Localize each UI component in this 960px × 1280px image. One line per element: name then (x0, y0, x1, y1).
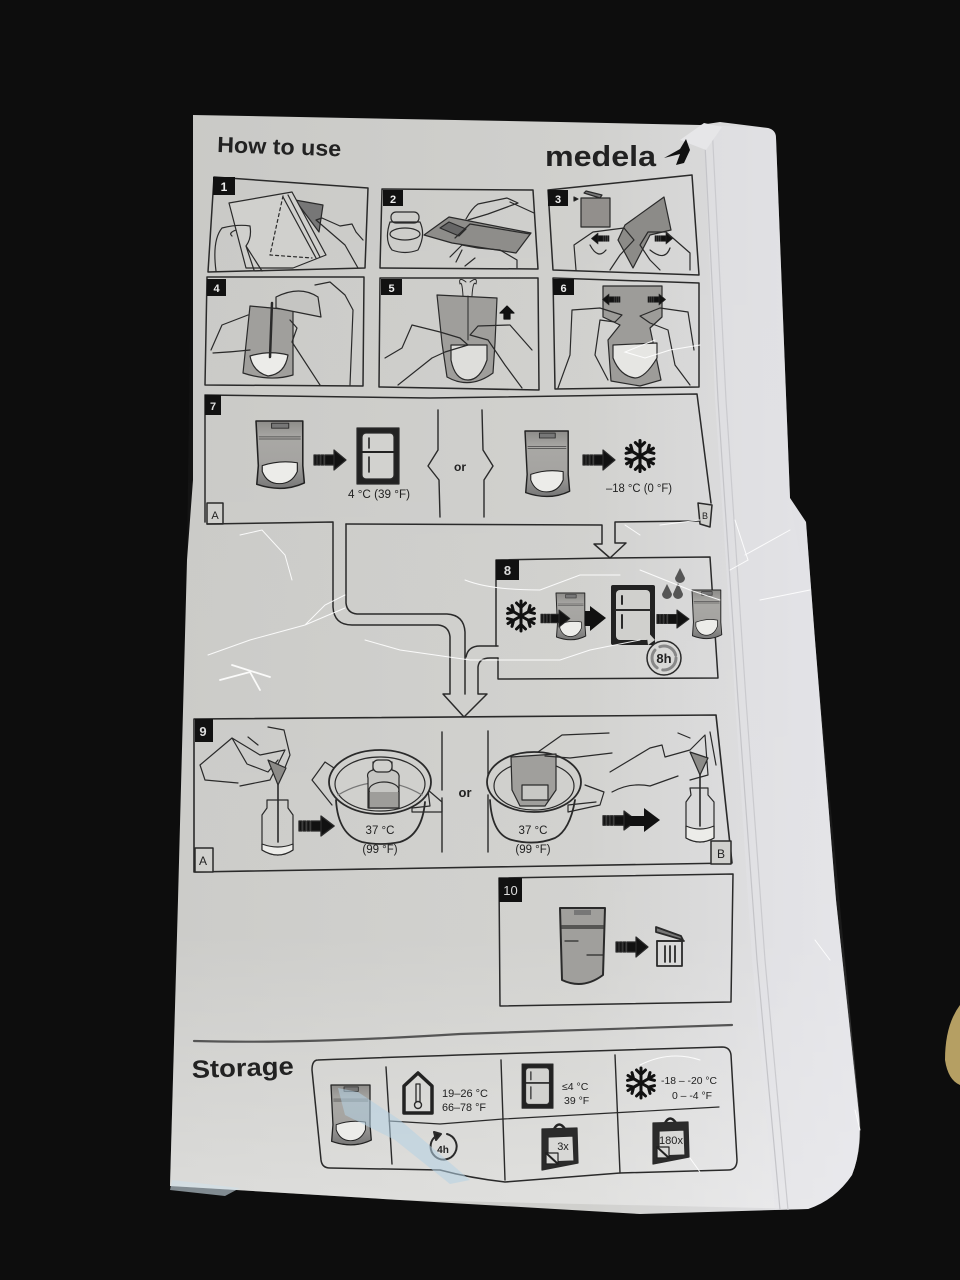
snowflake (624, 441, 656, 471)
clock 8h (646, 630, 681, 675)
room temperature (442, 1088, 488, 1114)
label B: B (717, 847, 725, 861)
label A (195, 848, 213, 872)
yellow object at edge (945, 1005, 960, 1085)
panel 10 (499, 874, 733, 1006)
label B (711, 841, 731, 864)
or divider (442, 731, 488, 852)
freezer temperature: –18 °C (0 °F) (606, 483, 672, 495)
clock 8h: 8h (656, 651, 672, 666)
plastic pouch (170, 115, 860, 1214)
panel 4 (205, 277, 364, 386)
hand pouring A (200, 727, 290, 786)
snowflake (626, 1068, 656, 1098)
panel 2 (380, 189, 538, 269)
step number 5: 5 (388, 283, 395, 295)
step number 6: 6 (560, 283, 567, 295)
blue reflection on storage table (338, 1088, 470, 1184)
flow arrows (207, 521, 700, 717)
step number 10 (499, 878, 522, 902)
pot temperature B: (99 °F) (515, 844, 551, 856)
4h timer (431, 1132, 457, 1160)
pot temperature A: (99 °F) (362, 844, 398, 856)
water drops (662, 568, 685, 599)
pot temperature B (515, 825, 551, 856)
fridge (611, 585, 655, 645)
or brace: or (454, 460, 466, 474)
label B (698, 503, 712, 527)
step number 6 (553, 279, 574, 295)
storage pouch A (256, 421, 304, 488)
house thermometer icon (404, 1073, 432, 1113)
3x calendar (542, 1124, 578, 1170)
step number 7 (205, 395, 221, 415)
arrow (657, 610, 689, 628)
panel 6 (553, 278, 699, 389)
storage pouch B (525, 431, 570, 496)
180x calendar (653, 1118, 689, 1164)
label A: A (211, 510, 219, 522)
3x calendar: 3x (557, 1141, 569, 1153)
arrow (616, 937, 648, 957)
pouch icon (331, 1085, 371, 1145)
panel 8 (496, 557, 722, 679)
panel 9 (194, 715, 732, 872)
frozen pouch (556, 593, 586, 640)
fridge temperature: 4 °C (39 °F) (348, 489, 410, 501)
bottle A (262, 785, 293, 855)
step number 2 (383, 190, 403, 206)
step number 9: 9 (199, 724, 207, 739)
arrow (541, 606, 606, 631)
room temperature: 19–26 °C (442, 1088, 488, 1100)
step number 10: 10 (503, 883, 518, 898)
step number 8: 8 (504, 563, 511, 578)
freezer temperature (661, 1076, 717, 1102)
arrow to freezer (583, 450, 615, 470)
fridge temperature (562, 1081, 589, 1107)
180x calendar: 180x (659, 1135, 683, 1147)
step number 3 (548, 190, 568, 206)
panel 7 (205, 394, 712, 527)
trash bin (656, 927, 684, 966)
step number 1 (213, 177, 235, 195)
fridge icon (357, 428, 399, 484)
plastic glare (208, 340, 860, 1172)
step number 4 (207, 279, 226, 296)
fridge icon (522, 1064, 553, 1108)
label A: A (199, 854, 207, 868)
medela logo (545, 139, 690, 173)
panel 1 (208, 177, 368, 272)
long arrow (603, 808, 660, 832)
freezer temperature: -18 – -20 °C (661, 1076, 717, 1087)
hand pouring B (610, 732, 716, 792)
freezer temperature: 0 – -4 °F (672, 1091, 712, 1102)
step number 5 (381, 279, 402, 295)
storage table (312, 1047, 737, 1182)
pot with pouch (487, 733, 612, 843)
arrow (299, 816, 334, 836)
pot temperature B: 37 °C (519, 825, 547, 837)
medela logo: medela (545, 141, 657, 173)
pot temperature A (362, 825, 398, 856)
storage heading: Storage (191, 1052, 294, 1084)
step number 1: 1 (221, 180, 228, 194)
panel 5 (379, 278, 539, 390)
pot temperature A: 37 °C (366, 825, 394, 837)
divider (194, 1025, 732, 1042)
fridge temperature: 39 °F (564, 1095, 589, 1107)
step number 7: 7 (210, 401, 216, 413)
fridge temperature: ≤4 °C (562, 1081, 589, 1093)
snowflake (506, 601, 536, 631)
step number 8 (496, 560, 519, 580)
panel 3 (548, 175, 699, 275)
step number 3: 3 (555, 194, 561, 206)
room temperature: 66–78 °F (442, 1102, 486, 1114)
label A (207, 503, 223, 524)
bottle B (686, 775, 714, 842)
4h timer: 4h (437, 1145, 449, 1156)
step number 9 (195, 719, 213, 742)
empty pouch (560, 908, 605, 984)
jar (387, 212, 423, 252)
or brace (428, 410, 493, 517)
step number 4: 4 (213, 283, 220, 295)
or divider: or (458, 785, 472, 800)
title: How to use (217, 132, 342, 161)
step number 2: 2 (390, 194, 396, 206)
label B: B (702, 511, 708, 521)
arrow to fridge (314, 450, 346, 470)
thawed pouch (692, 590, 722, 639)
pot with bottle (312, 750, 442, 844)
